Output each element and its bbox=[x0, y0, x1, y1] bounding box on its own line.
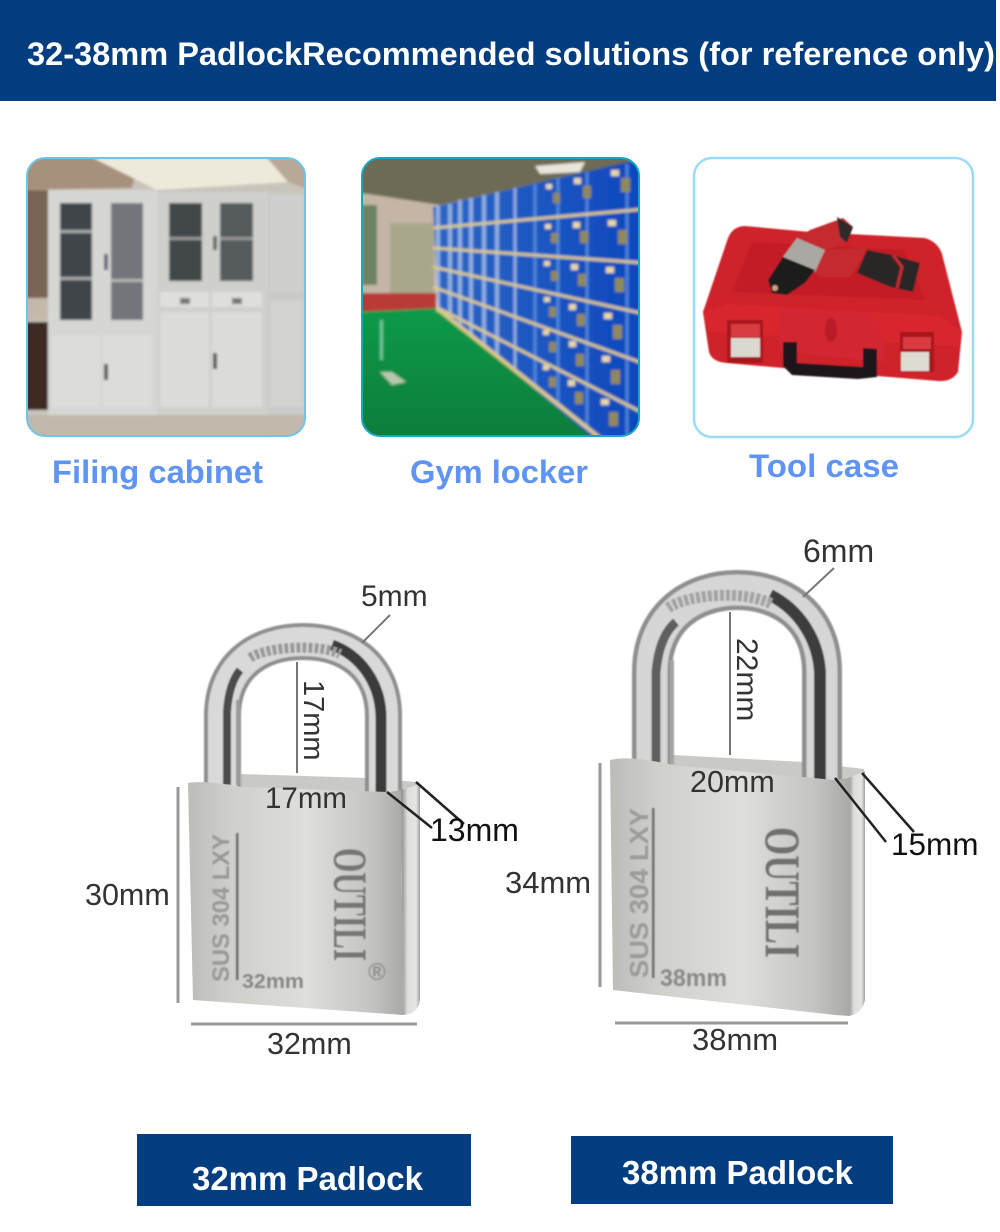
panel: gym locker photo bbox=[355, 150, 645, 440]
dimension labels: 38mm padlock: 15mm bbox=[891, 826, 979, 862]
label: 38mm padlock: 38mm Padlock bbox=[622, 1154, 854, 1191]
lock body bbox=[848, 771, 865, 1016]
engraving: 38mm bbox=[660, 965, 727, 992]
dimension labels: 32mm padlock: 17mm bbox=[265, 782, 347, 815]
header title: 32-38mm PadlockRecommended solutions (for reference only) bbox=[27, 36, 995, 72]
dimension labels: 38mm padlock: 34mm bbox=[505, 865, 591, 900]
dimension labels: 32mm padlock: 32mm bbox=[267, 1027, 352, 1061]
label: 38mm padlock bbox=[571, 1136, 893, 1204]
panel: filing cabinet photo bbox=[20, 150, 310, 440]
dimension labels: 38mm padlock: 20mm bbox=[690, 765, 775, 799]
engraving: OUTILI bbox=[323, 848, 376, 961]
padlock 38mm bbox=[610, 590, 865, 1016]
engraving bbox=[624, 808, 811, 992]
shackle bbox=[652, 590, 822, 785]
top surface bbox=[673, 755, 864, 786]
lock body bbox=[401, 784, 420, 1015]
caption: filing cabinet: Filing cabinet bbox=[52, 454, 263, 490]
dimension labels: 32mm padlock bbox=[85, 580, 519, 1061]
dimension labels: 32mm padlock: 13mm bbox=[430, 812, 519, 848]
dimension labels: 38mm padlock: 22mm bbox=[730, 638, 763, 721]
icon: red tool case bbox=[703, 217, 962, 381]
label: 32mm padlock bbox=[137, 1134, 471, 1206]
shackle bbox=[222, 642, 384, 795]
dimension labels: 32mm padlock: 30mm bbox=[85, 878, 170, 912]
dimension labels: 32mm padlock: 5mm bbox=[361, 580, 428, 613]
engraving: OUTILI bbox=[755, 827, 811, 958]
engraving: 32mm bbox=[242, 971, 304, 993]
dimension lines bbox=[178, 568, 914, 1024]
dimension labels: 38mm padlock: 6mm bbox=[803, 533, 874, 569]
engraving: SUS 304 LXY bbox=[208, 834, 235, 982]
label: 32mm padlock: 32mm Padlock bbox=[192, 1160, 424, 1197]
engraving: ® bbox=[368, 959, 386, 986]
caption: tool case: Tool case bbox=[749, 448, 899, 484]
header banner bbox=[0, 0, 996, 101]
dimension labels: 32mm padlock: 17mm bbox=[297, 680, 329, 761]
caption: gym locker: Gym locker bbox=[410, 454, 588, 490]
engraving bbox=[208, 833, 386, 993]
top surface bbox=[241, 774, 418, 794]
icon: cordless drill bbox=[768, 217, 920, 295]
dimension labels: 38mm padlock bbox=[505, 533, 979, 1057]
engraving: SUS 304 LXY bbox=[624, 808, 654, 978]
padlock 32mm bbox=[188, 642, 420, 1015]
dimension labels: 38mm padlock: 38mm bbox=[692, 1022, 778, 1057]
panel: tool case photo bbox=[694, 158, 973, 437]
